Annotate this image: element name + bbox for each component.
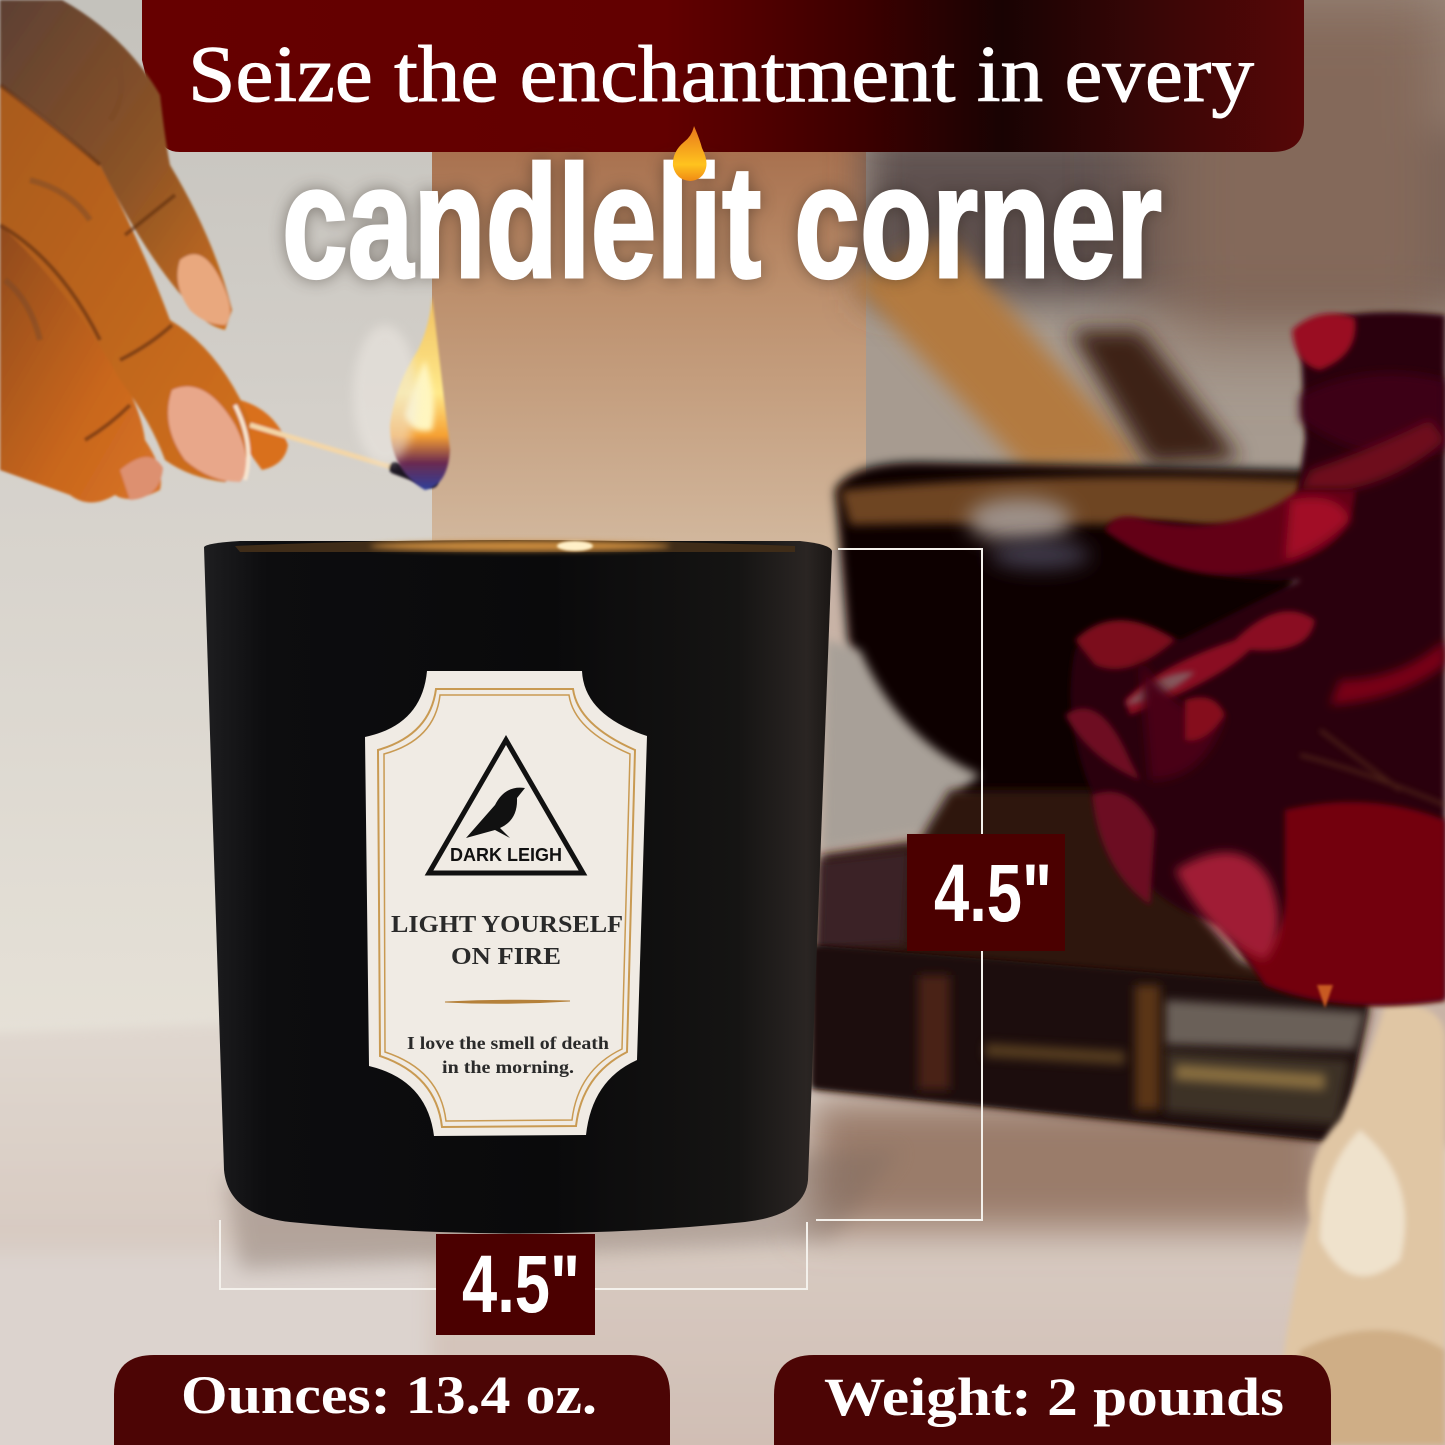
ounces pill [114,1355,670,1445]
shadow under candle [225,1150,900,1270]
hand holding match [0,0,432,502]
fingernails [178,254,230,325]
match flame [353,296,450,490]
candle label: ON FIRE [451,944,561,970]
candle rim glow [235,540,795,552]
top finger [0,0,232,330]
blurred stack of books [812,790,1370,1142]
label product name: LIGHT YOURSELF [391,912,623,938]
candle label: in the morning. [442,1057,574,1077]
height dimension bracket [816,549,982,1220]
width label [436,1234,595,1335]
ounces pill: Ounces: 13.4 oz. [181,1365,597,1425]
label tagline: I love the smell of death [407,1033,609,1053]
candle label [365,671,647,1136]
mallet shadow on wall [1070,330,1240,465]
cream ceramic vase [1272,1004,1445,1445]
width label: 4.5" [462,1239,580,1330]
logo: raven triangle: DARK LEIGH [450,845,562,865]
icon: small flame over title [673,126,706,181]
weight pill: Weight: 2 pounds [824,1367,1284,1427]
knuckle wrinkles [5,60,121,340]
height label: 4.5" [934,848,1052,939]
logo: raven triangle [429,740,583,873]
height label [907,834,1065,951]
width dimension bracket [220,1220,807,1289]
matchstick [250,425,395,468]
title line two: candlelit corner [282,132,1162,311]
dark red flowers [1065,312,1445,1008]
weight pill [774,1355,1331,1445]
title line one: Seize the enchantment in every [188,29,1255,119]
middle finger [0,85,251,482]
top banner [142,0,1304,152]
finger creases [0,85,175,440]
lower finger [0,225,161,502]
white object behind bowl [822,640,980,850]
blurred wooden mallet [850,235,1145,470]
blurred singing bowl [835,462,1310,815]
candle jar [204,540,832,1234]
thumb tip behind [240,400,288,470]
